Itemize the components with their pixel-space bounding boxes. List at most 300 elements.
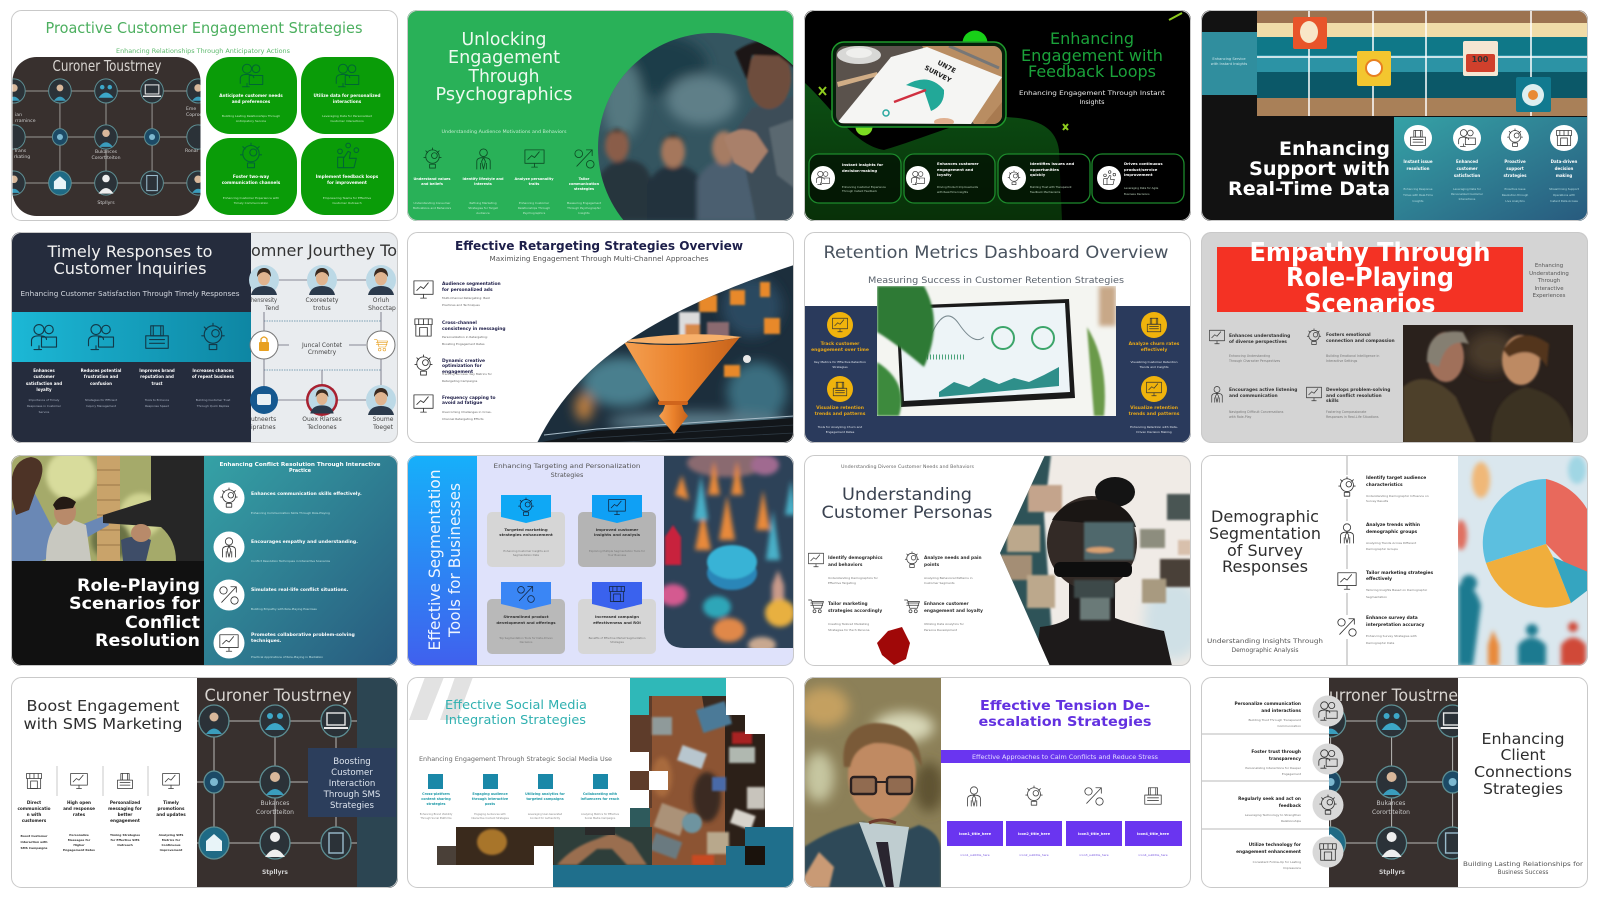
- channel captions: SMS Campaigns: [21, 846, 48, 850]
- item titles: [1366, 475, 1434, 628]
- strategy titles: avoid ad fatigue: [442, 400, 482, 406]
- metric captions: Strategies: [832, 365, 848, 369]
- channel captions: Interactive Content Strategies: [471, 816, 510, 820]
- item titles: Identify target audience: [1366, 475, 1426, 481]
- band item titles: of repeat business: [192, 374, 235, 379]
- title: Responses: [1222, 557, 1308, 576]
- card: utilize data: Utilize data for personalized: [314, 93, 381, 98]
- subtitle: Enhancing Engagement Through Strategic Social Media Use: [419, 756, 612, 763]
- item titles: Encourages empathy and understanding.: [251, 539, 358, 545]
- strategy captions: Boosting Engagement Rates: [442, 342, 485, 346]
- journey diagram: [1255, 676, 1529, 888]
- item captions: Analyzing Trends Across Different: [1366, 541, 1417, 545]
- callout box: Strategies: [330, 801, 374, 811]
- subtitle: [1463, 862, 1584, 876]
- slide 4: real-time support: [1201, 10, 1588, 221]
- panel heading: [220, 462, 381, 474]
- icon titles: and beliefs: [421, 182, 443, 186]
- title: Proactive Customer Engagement Strategies: [46, 19, 363, 37]
- card: two-way channels: [206, 138, 297, 215]
- panel item titles: decision: [1555, 166, 1573, 171]
- item titles: [251, 491, 362, 644]
- journey map panel: Soume: [373, 416, 394, 423]
- title: [1021, 29, 1163, 81]
- strategy titles: optimization for: [442, 363, 483, 369]
- subtitle: Enhancing Relationships Through Anticipatory Actions: [116, 47, 291, 55]
- journey map panel: hensresity: [251, 297, 277, 304]
- slide 5: timely responses: [11, 232, 398, 443]
- title: Role-Playing: [1286, 263, 1454, 293]
- journey diagram panel: Ronar: [185, 148, 199, 154]
- channel titles: better: [118, 812, 133, 817]
- box captions: [960, 853, 1168, 857]
- item titles: and conflict resolution: [1326, 393, 1382, 399]
- side note: Interactive: [1534, 286, 1564, 292]
- slide 11: customer personas: [804, 455, 1204, 666]
- title: with SMS Marketing: [24, 715, 182, 733]
- panel icon glyphs: [1410, 129, 1572, 146]
- box captions: icon2_subtitle_here: [1019, 853, 1049, 857]
- title: Customer Personas: [822, 503, 993, 523]
- title: [1250, 238, 1490, 319]
- icon row: [424, 148, 594, 169]
- icon captions: Psychographics: [523, 211, 546, 215]
- slide 16: client connections: [1201, 676, 1588, 888]
- icon captions: Refining Marketing: [469, 201, 497, 205]
- journey diagram panel: [3, 57, 209, 217]
- right teal panel: [1394, 117, 1588, 221]
- channel captions: Through Social Platforms: [420, 816, 452, 820]
- row titles: feedback: [1279, 803, 1301, 809]
- feedback cards: [809, 154, 1184, 203]
- side note: Enhancing: [1535, 263, 1563, 269]
- title: Scenarios: [1304, 289, 1436, 319]
- item captions: Survey Results: [1366, 499, 1389, 503]
- channel captions: Engagement Rates: [63, 848, 95, 852]
- channel captions: for Effective SMS: [110, 838, 140, 842]
- row captions: Impressions: [1283, 866, 1301, 870]
- panel item titles: Instant issue: [1403, 159, 1433, 164]
- item titles: Encourages active listening: [1229, 387, 1297, 393]
- left teal note panel: [1201, 32, 1257, 95]
- box captions: icon1_subtitle_here: [960, 853, 990, 857]
- card captions: [498, 549, 646, 644]
- journey diagram panel: Trans: [13, 148, 27, 154]
- journey diagram panel: rramince: [15, 118, 36, 124]
- channel captions: Outreach: [117, 843, 133, 847]
- row captions: Engagement: [1282, 772, 1302, 776]
- card: two-way channels: communication channels: [222, 180, 281, 185]
- item icons: [1210, 329, 1322, 402]
- card titles: Targeted marketing: [504, 527, 548, 532]
- item captions: Understanding Demographics for: [828, 576, 879, 580]
- channel titles: messaging for: [108, 806, 143, 811]
- callout box: [308, 748, 396, 817]
- strategy titles: [442, 281, 506, 406]
- photo circle: pointing man and team: [598, 33, 794, 221]
- vertical title: Tools for Businesses: [445, 483, 464, 638]
- journey map panel: ipratnes: [251, 424, 276, 431]
- photo: desk of social media prints: [437, 696, 767, 865]
- card captions: Feedback Mechanisms: [1030, 190, 1061, 194]
- icon captions: Motivations and Behaviors: [413, 206, 452, 210]
- row captions: Communication: [1277, 724, 1301, 728]
- left teal note panel: with Instant Insights: [1211, 62, 1247, 66]
- row titles: and interactions: [1261, 708, 1301, 714]
- photo: man with glasses: [799, 677, 944, 888]
- channel captions: Leveraging User-Generated: [528, 812, 563, 816]
- strategy captions: Multi-Channel Retargeting: Best: [442, 296, 491, 300]
- title: Understanding: [842, 485, 972, 505]
- channel titles: promotions: [158, 806, 185, 811]
- box labels: icon2_title_here: [1018, 832, 1051, 836]
- photo: survey clipboard: [832, 42, 1006, 127]
- band captions: Importance of Timely: [29, 398, 60, 402]
- subtitle: Business Success: [1498, 870, 1548, 876]
- channel captions: Analyzing SMS: [159, 833, 183, 837]
- band item titles: Reduces potential: [81, 368, 122, 373]
- icon titles: [413, 177, 600, 191]
- slide 3: feedback loops: [804, 10, 1191, 221]
- photo: pie chart and figures: [1455, 455, 1596, 666]
- journey map panel: Ouex Rlarses: [302, 416, 342, 423]
- strategy captions: Personalization in Retargeting:: [442, 335, 488, 339]
- title: Enhancing: [1050, 29, 1134, 48]
- item captions: Tailoring Insights Based on Demographic: [1365, 588, 1428, 592]
- title: Engagement with: [1021, 46, 1163, 65]
- channel titles: rates: [73, 812, 86, 817]
- channel titles: Engaging audience: [472, 792, 508, 796]
- metric titles: Track customer: [821, 341, 860, 347]
- channel titles: targeted campaigns: [526, 797, 564, 801]
- item titles: Analyze needs and pain: [924, 555, 982, 561]
- slide 13: SMS marketing: [11, 676, 412, 888]
- strategy titles: Audience segmentation: [442, 281, 501, 287]
- title: Boost Engagement: [26, 697, 180, 715]
- card tab icons: [518, 498, 625, 602]
- band captions: [27, 398, 231, 414]
- photo: silhouette collage: [994, 455, 1204, 666]
- icon captions: Relationships Through: [518, 206, 550, 210]
- metric icons: [827, 312, 1167, 402]
- icon captions: [413, 202, 602, 214]
- slide 2: psychographics: [407, 10, 797, 225]
- journey diagram: Stpllyrs: [1379, 869, 1405, 876]
- panel item titles: support: [1506, 166, 1524, 171]
- callout box: Through SMS: [323, 790, 380, 800]
- journey diagram: Corortlteiton: [1372, 809, 1410, 816]
- title: Effective Social Media: [445, 697, 587, 712]
- panel captions: Leveraging Data for: [1453, 187, 1482, 191]
- box captions: icon4_subtitle_here: [1138, 853, 1168, 857]
- box labels: icon4_title_here: [1137, 832, 1170, 836]
- card: utilize data: Customer Interactions: [330, 119, 364, 123]
- row titles: Utilize technology for: [1249, 842, 1302, 848]
- row titles: Personalize communication: [1234, 701, 1301, 707]
- panel heading: Practice: [289, 468, 312, 474]
- channel titles: through interactive: [472, 797, 509, 801]
- right teal panel: [204, 455, 398, 666]
- card icons: [811, 166, 1121, 190]
- item captions: Creating Tailored Marketing: [828, 622, 869, 626]
- title: [1474, 730, 1572, 798]
- title: [24, 697, 182, 733]
- item titles: and communication: [1229, 393, 1278, 399]
- panel item titles: [1403, 159, 1577, 178]
- photo: timeline tiles: 100: [1472, 55, 1489, 64]
- photo: two men talking: [1403, 325, 1573, 443]
- subtitle: [1020, 90, 1165, 106]
- journey map panel: Cxoreetety: [306, 297, 339, 304]
- journey map panel: Tecloones: [306, 424, 337, 431]
- green accent circles: [856, 30, 988, 136]
- slide 14: social media integration: [407, 677, 794, 888]
- metric titles: trends and patterns: [1129, 411, 1180, 417]
- metric captions: Enhancing Retention with Data-: [1130, 425, 1178, 429]
- subtitle: Enhancing Customer Satisfaction Through Timely Responses: [20, 290, 240, 298]
- channel titles: n with: [27, 812, 41, 817]
- subtitle: Maximizing Engagement Through Multi-Channel Approaches: [490, 255, 709, 263]
- item titles: Enhances communication skills effectively.: [251, 491, 362, 497]
- card captions: Benefits of Effective Market Segmentation: [589, 636, 646, 640]
- item titles: Identify demographics: [828, 555, 883, 561]
- panel item titles: resolution: [1407, 166, 1430, 171]
- card: feedback loops: Empowering Teams for Effective: [323, 196, 371, 200]
- card text: product/service: [1124, 167, 1158, 172]
- channel captions: Content for Authenticity: [530, 816, 561, 820]
- title: Resolution: [95, 631, 200, 651]
- subtitle: [494, 462, 640, 479]
- red octagon: [877, 627, 910, 665]
- row captions: Building Trust Through Transparent: [1248, 718, 1302, 722]
- item captions: Fostering Compassionate: [1326, 410, 1366, 414]
- title: of Survey: [1227, 541, 1303, 560]
- panel captions: Live Analytics: [1505, 199, 1525, 203]
- side note: [1529, 263, 1569, 299]
- item captions: Demographic Data: [1366, 641, 1394, 645]
- card captions: with Real-Time Insights: [937, 190, 969, 194]
- item titles: engagement and loyalty: [924, 608, 983, 614]
- item titles: strategies accordingly: [828, 608, 882, 614]
- card titles: effectiveness and ROI: [593, 620, 641, 625]
- slide 8: empathy role-playing: [1201, 232, 1588, 443]
- card: utilize data: interactions: [333, 99, 362, 104]
- eyebrow subtitle: Understanding Diverse Customer Needs and Behaviors: [841, 464, 975, 470]
- slide 15: tension de-escalation: [799, 677, 1191, 888]
- channel captions: Metrics for: [162, 838, 181, 842]
- channel titles: engagement: [110, 818, 140, 823]
- panel heading: Enhancing Conflict Resolution Through Interactive: [220, 462, 381, 468]
- item captions: Strategies for Each Persona: [828, 628, 870, 632]
- column dividers: [57, 766, 148, 796]
- panel item titles: Enhanced: [1456, 159, 1478, 164]
- card titles: [496, 527, 641, 625]
- card: feedback loops: for improvement: [327, 180, 367, 185]
- item titles: of diverse perspectives: [1229, 339, 1287, 345]
- card captions: [842, 186, 1158, 195]
- band item titles: trust: [151, 381, 163, 386]
- purple subtitle band: [941, 750, 1191, 763]
- band item titles: Increases chances: [192, 368, 234, 373]
- journey diagram panel: rkating: [14, 154, 30, 160]
- card: feedback loops: [301, 138, 394, 215]
- title: Role-Playing: [77, 576, 200, 596]
- journey map panel: [249, 232, 398, 443]
- cards: [487, 512, 656, 654]
- purple subtitle band: Effective Approaches to Calm Conflicts and Reduce Stress: [972, 755, 1158, 761]
- callout box: Boosting: [333, 757, 371, 767]
- channel titles: Personalized: [110, 800, 140, 805]
- callout box: Customer: [331, 768, 373, 778]
- item captions: Effective Targeting: [828, 581, 856, 585]
- panel item titles: Data-driven: [1551, 159, 1577, 164]
- card captions: Enhancing Customer Experience: [842, 185, 886, 189]
- channel captions: Messages for: [68, 838, 91, 842]
- metric titles: engagement over time: [811, 347, 869, 353]
- row captions: Relationships: [1281, 819, 1301, 823]
- strategy icons: [414, 281, 433, 412]
- title: Enhancing: [1279, 138, 1390, 160]
- band captions: Responses in Customer: [27, 404, 62, 408]
- vertical title: [425, 470, 464, 650]
- item captions: Responses in Real-Life Situations: [1326, 415, 1379, 419]
- panel captions: Instant Data Access: [1550, 199, 1578, 203]
- strategy captions: Overcoming Challenges in Cross-: [442, 410, 492, 414]
- item icons: [808, 552, 920, 613]
- icon titles: communication: [569, 182, 600, 186]
- photo: timeline tiles: [1257, 10, 1588, 116]
- card captions: Enhancing Customer Insights and: [503, 549, 549, 553]
- title: Connections: [1474, 763, 1572, 781]
- subtitle: Enhancing Targeting and Personalization: [494, 462, 640, 470]
- metric captions: Trends and Insights: [1138, 365, 1169, 369]
- row circles: [1312, 696, 1344, 868]
- strategy captions: Retargeting Campaigns: [442, 379, 478, 383]
- journey diagram panel: ian: [15, 112, 22, 118]
- item captions: Understanding Demographic Influence on: [1366, 494, 1429, 498]
- channel titles: strategies: [427, 802, 445, 806]
- bottom teal blocks: [553, 827, 794, 888]
- slide 12: demographic segmentation: [1201, 455, 1596, 666]
- metric titles: Visualize retention: [1130, 405, 1178, 411]
- title: Psychographics: [436, 84, 572, 105]
- channel titles: [17, 800, 186, 823]
- band captions: Building Customer Trust: [196, 398, 231, 402]
- band captions: Inquiry Management: [86, 404, 117, 408]
- slide 6: retargeting: [407, 232, 797, 447]
- journey diagram panel: Curoner Toustrney: [52, 57, 162, 75]
- channel captions: Higher: [73, 843, 85, 847]
- vertical title: Effective Segmentation: [425, 470, 444, 650]
- panel item titles: customer: [1456, 166, 1478, 171]
- photo wedge: funnel over keyboard: [527, 262, 797, 447]
- item titles: Tailor marketing: [828, 601, 868, 607]
- channel titles: content sharing: [421, 797, 451, 801]
- journey diagram panel: Coprod: [186, 112, 203, 118]
- icon titles: Identify lifestyle and: [462, 177, 504, 181]
- band item titles: frustration and: [84, 374, 118, 379]
- subtitle: [1207, 638, 1323, 654]
- item captions: Building Empathy with Role-Playing Exercises: [251, 607, 317, 611]
- channel titles: Cross-platform: [422, 792, 450, 796]
- item captions: Enhancing Communication Skills Through Role-Playing: [251, 511, 330, 515]
- side note: Through: [1537, 278, 1560, 284]
- strategy titles: for personalized ads: [442, 287, 493, 293]
- panel captions: Insights: [1413, 199, 1424, 203]
- channel titles: customers: [22, 818, 47, 823]
- icon titles: Tailor: [579, 177, 590, 181]
- item titles: Enhance survey data: [1366, 615, 1418, 621]
- channel titles: Direct: [27, 800, 41, 805]
- journey map panel: Crnmetry: [308, 349, 337, 356]
- metric captions: Tools for Analyzing Churn and: [817, 425, 862, 429]
- card: two-way channels: Foster two-way: [233, 174, 269, 179]
- metric titles: Analyze churn rates: [1129, 341, 1180, 347]
- slide 9: conflict resolution: [11, 450, 398, 666]
- subtitle: Understanding Audience Motivations and Behaviors: [442, 129, 567, 135]
- panel captions: Times with Real-Time: [1402, 193, 1433, 197]
- photo: survey clipboard: UN7E: [936, 59, 957, 75]
- journey diagram panel: Bukances: [95, 149, 118, 155]
- channel titles: High open: [67, 800, 91, 805]
- title: [1209, 507, 1321, 576]
- item captions: [828, 576, 973, 632]
- item icons: [220, 488, 238, 651]
- journey diagram: Bukances: [1377, 800, 1405, 807]
- box labels: [959, 832, 1170, 836]
- item titles: Develops problem-solving: [1326, 387, 1390, 393]
- title: Scenarios for: [69, 594, 201, 614]
- item captions: Persona Development: [924, 628, 958, 632]
- card tabs: [501, 495, 642, 610]
- panel captions: Proactive Issue: [1504, 187, 1526, 191]
- card: two-way channels: Enhancing Customer Experience with: [223, 196, 279, 200]
- title: Feedback Loops: [1028, 62, 1156, 81]
- card: utilize data: [301, 57, 394, 134]
- panel captions: Operations with: [1553, 193, 1575, 197]
- strategy title boxes: [947, 821, 1182, 846]
- callout box: Interaction: [329, 779, 375, 789]
- icon captions: Enhancing Customer: [519, 201, 550, 205]
- strategy captions: Channel Retargeting Efforts: [442, 417, 484, 421]
- channel captions: Interaction with: [20, 840, 48, 844]
- band captions: Response Speed: [145, 404, 169, 408]
- strategy captions: Practices and Techniques: [442, 303, 480, 307]
- item titles: demographic groups: [1366, 529, 1417, 535]
- card captions: Top Segmentation Tools for Data-Driven: [498, 636, 553, 640]
- channel titles: posts: [485, 802, 495, 806]
- strategy titles: consistency in messaging: [442, 326, 506, 332]
- band captions: Service: [39, 410, 50, 414]
- row captions: [1245, 718, 1302, 870]
- metric titles: effectively: [1141, 347, 1167, 353]
- title: Demographic: [1211, 507, 1319, 526]
- card: anticipate needs: [206, 57, 297, 134]
- blue title bar: [407, 455, 477, 666]
- card icon glyphs: [816, 171, 1116, 185]
- title: Timely Responses to: [46, 242, 213, 261]
- item titles: Fosters emotional: [1326, 332, 1371, 338]
- panel captions: Streamlining Support: [1549, 187, 1580, 191]
- journey diagram panel: Stpllyrs: [97, 200, 115, 206]
- card captions: Segmentation Data: [513, 553, 539, 557]
- teal icon band: [11, 312, 251, 362]
- card titles: Streamlined product: [503, 614, 549, 619]
- item titles: interpretation accuracy: [1366, 622, 1425, 628]
- top teal block: [630, 677, 726, 715]
- channel captions: [420, 812, 619, 820]
- item captions: Interactive Settings: [1326, 359, 1358, 363]
